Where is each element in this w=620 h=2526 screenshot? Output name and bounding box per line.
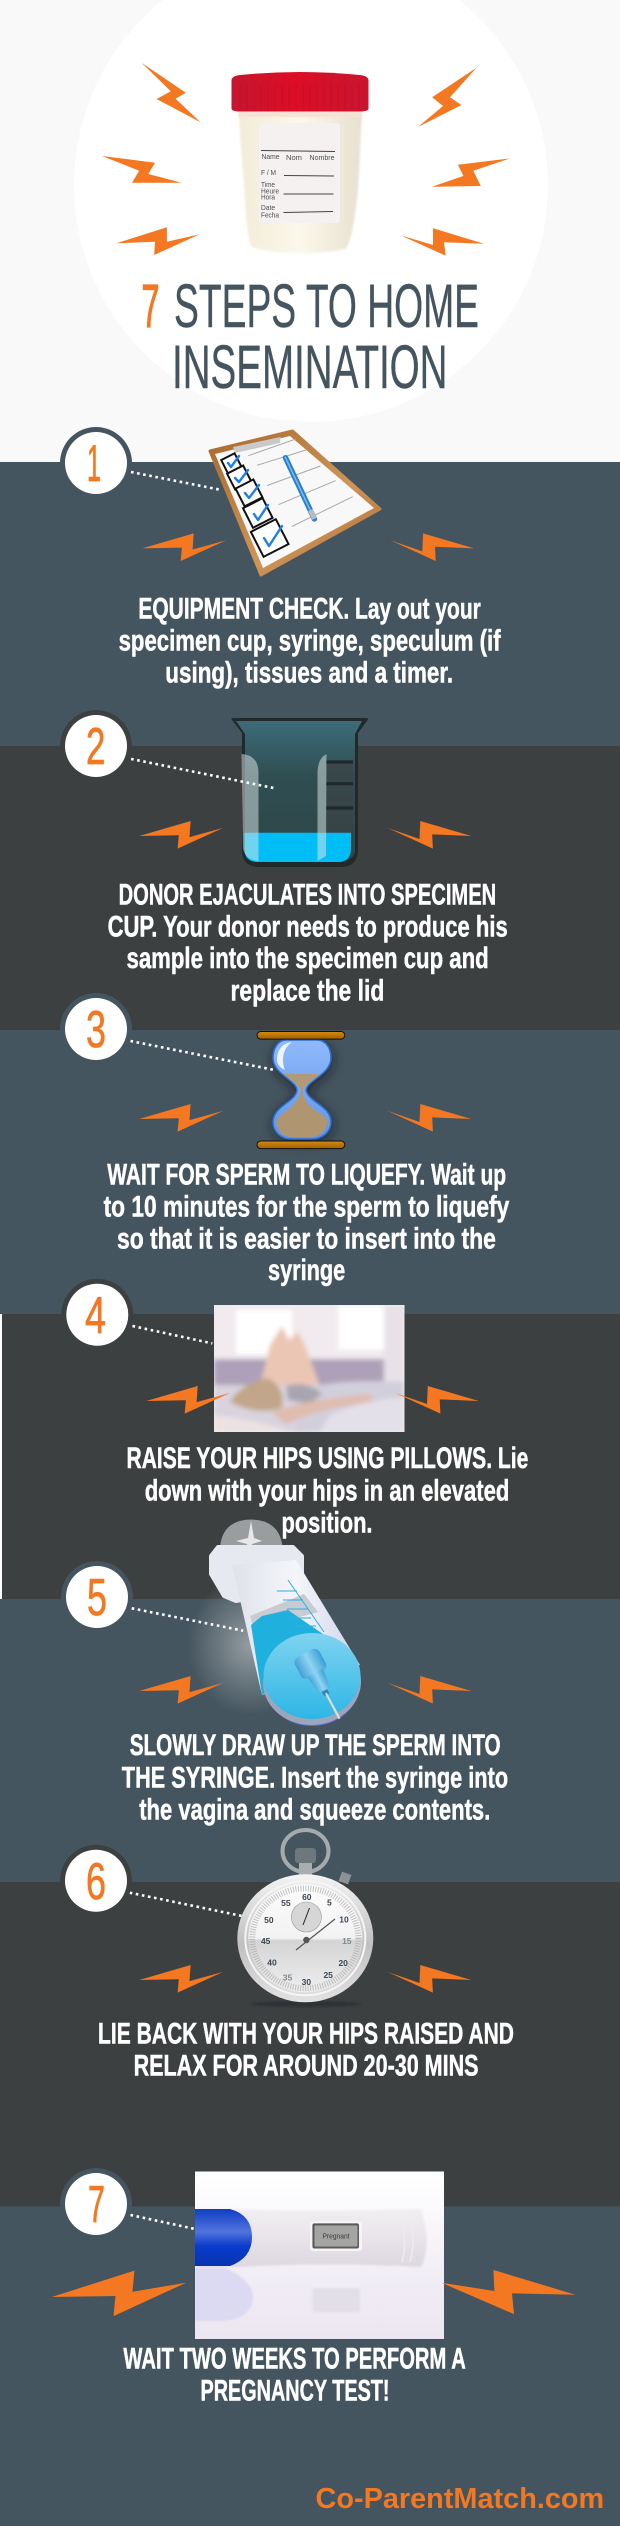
icon: syringe <box>188 1520 363 1728</box>
text: step 3: syringe <box>268 1254 345 1287</box>
icon: stopwatch: 20 <box>338 1958 348 1968</box>
dotted connector 1 <box>131 472 221 490</box>
icon: stopwatch: 35 <box>283 1972 292 1982</box>
panel: step 7 <box>0 2168 620 2526</box>
text: step 1: EQUIPMENT CHECK. Lay out your <box>138 592 481 625</box>
number badge 7: 7 <box>88 2176 105 2234</box>
panel: step 2 <box>0 710 620 1030</box>
dotted connector 5 <box>132 1608 243 1631</box>
dotted connector 7 <box>130 2215 195 2229</box>
text: step 5: the vagina and squeeze contents. <box>139 1793 490 1826</box>
number badge 2 <box>60 710 132 782</box>
number badge 7 <box>60 2168 132 2240</box>
number badge 1 <box>60 427 132 499</box>
lightning bolt right <box>388 1965 471 1993</box>
icon: stopwatch: 50 <box>264 1915 274 1925</box>
white circle backdrop <box>74 0 548 422</box>
panel: step 1 <box>0 427 620 746</box>
text: step 1: specimen cup, syringe, speculum (if <box>119 624 501 658</box>
panel: step 5 <box>0 1520 620 1882</box>
text: step 1: using), tissues and a timer. <box>165 656 453 689</box>
icon: specimen cup: F / M <box>261 168 276 177</box>
lightning bolt left <box>139 1676 223 1704</box>
text: step 7: PREGNANCY TEST! <box>200 2374 390 2408</box>
panel: step 3 <box>0 993 620 1314</box>
lightning bolt right <box>388 1104 471 1132</box>
lightning bolt right <box>390 533 474 561</box>
text: step 5 <box>122 1729 508 1826</box>
lightning bolt left <box>52 2271 186 2316</box>
footer website link: Co-ParentMatch.com <box>316 2483 604 2515</box>
icon: specimen cup: Hora <box>261 192 276 202</box>
dotted connector 2 <box>107 754 274 788</box>
text: step 3: to 10 minutes for the sperm to liquefy <box>104 1191 510 1224</box>
icon: stopwatch <box>237 1830 373 2007</box>
text: step 2 <box>108 878 508 1007</box>
number badge 5 <box>61 1561 133 1633</box>
icon: specimen cup: Heure <box>261 186 279 196</box>
text: step 6 <box>98 2017 514 2082</box>
number badge 3 <box>60 993 132 1065</box>
lightning bolt left <box>139 1965 223 1993</box>
lightning bolt left <box>142 533 226 561</box>
text: step 2: sample into the specimen cup and <box>126 942 489 975</box>
photo: digital pregnancy test: Pregnant <box>322 2232 350 2240</box>
text: step 2: replace the lid <box>230 974 384 1007</box>
icon: stopwatch: 45 <box>261 1936 271 1946</box>
icon: specimen cup: Date <box>261 203 275 212</box>
number badge 2: 2 <box>86 718 105 776</box>
panel: header <box>0 0 620 462</box>
icon: specimen cup: Fecha <box>261 210 280 220</box>
icon: stopwatch: 5 <box>327 1898 332 1908</box>
number badge 3: 3 <box>86 1001 106 1059</box>
icon: clipboard with checklist <box>210 431 380 575</box>
icon: hourglass <box>257 1032 345 1149</box>
number badge 6: 6 <box>86 1853 106 1911</box>
text: step 7 <box>123 2342 466 2408</box>
lightning bolt right <box>388 821 471 849</box>
photo: woman lying on bed with legs raised <box>214 1305 404 1432</box>
icon: stopwatch: 60 <box>302 1892 312 1902</box>
number badge 6 <box>60 1845 132 1917</box>
text: step 4: position. <box>282 1506 372 1539</box>
number badge 4: 4 <box>85 1287 106 1345</box>
icon: stopwatch: 15 <box>342 1936 352 1946</box>
number badge 5: 5 <box>87 1569 107 1627</box>
icon: specimen cup <box>232 72 368 253</box>
panel: step 6 <box>0 1830 620 2206</box>
icon: specimen cup: Nom <box>286 153 302 162</box>
icon: stopwatch: 10 <box>339 1914 349 1924</box>
text: step 7: WAIT TWO WEEKS TO PERFORM A <box>123 2342 466 2375</box>
text: step 1 <box>119 592 501 689</box>
icon: stopwatch: 30 <box>302 1977 311 1987</box>
text: step 3 <box>104 1159 510 1287</box>
lightning bolt left <box>139 1104 223 1132</box>
lightning bolt left <box>139 821 223 849</box>
title: INSEMINATION <box>172 333 448 401</box>
title: 7 <box>142 272 160 340</box>
lightning bolt left <box>146 1386 230 1414</box>
panel: step 4 <box>0 1279 620 1599</box>
icon: beaker with blue liquid <box>231 718 368 867</box>
icon: specimen cup: Nombre <box>310 153 334 162</box>
icon: specimen cup: Name <box>262 152 280 161</box>
icon: stopwatch: 55 <box>281 1898 291 1908</box>
dotted connector 3 <box>130 1041 274 1070</box>
icon: stopwatch: 25 <box>323 1970 333 1980</box>
lightning bolt right <box>441 2270 575 2314</box>
number badge 1: 1 <box>87 435 101 493</box>
dotted connector 6 <box>130 1893 242 1916</box>
lightning bolt right <box>388 1676 471 1704</box>
number badge 4 <box>61 1279 133 1351</box>
icon: specimen cup: Time <box>261 180 275 189</box>
text: step 4: down with your hips in an elevated <box>145 1474 509 1507</box>
text: step 4 <box>126 1442 528 1539</box>
title <box>142 272 479 401</box>
photo: digital pregnancy test <box>195 2172 444 2339</box>
dotted connector 4 <box>132 1326 212 1343</box>
text: step 3: so that it is easier to insert into the <box>117 1222 496 1256</box>
lightning bolt right <box>395 1386 479 1414</box>
text: step 6: RELAX FOR AROUND 20-30 MINS <box>134 2049 478 2082</box>
orange lightning bolts around cup <box>102 63 510 256</box>
icon: stopwatch: 40 <box>267 1958 277 1968</box>
